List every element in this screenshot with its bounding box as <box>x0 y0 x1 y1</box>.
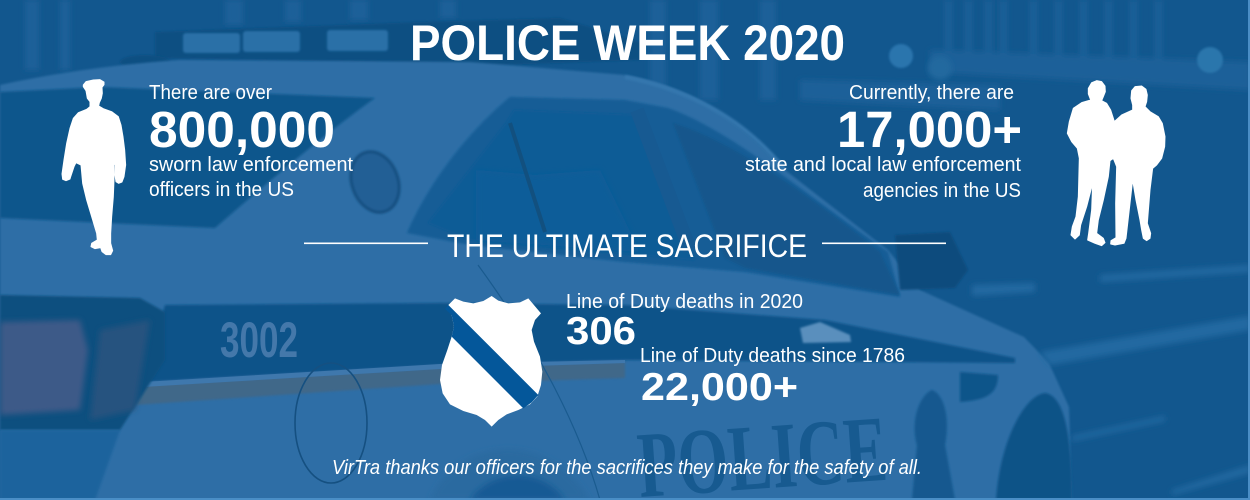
stat: law enforcement agencies: Currently, there are <box>849 82 1014 104</box>
tail light <box>0 295 165 430</box>
title: POLICE WEEK 2020 <box>410 15 845 71</box>
stat: sworn officers: officers in the US <box>149 179 294 201</box>
roof highlight <box>625 77 785 170</box>
footer thanks message: VirTra thanks our officers for the sacrifices they make for the safety of all. <box>332 457 922 479</box>
road streaks <box>972 265 1250 495</box>
door seam and wheel arch <box>469 264 600 498</box>
side window surround <box>407 97 900 297</box>
stat: sworn officers: There are over <box>149 82 272 104</box>
light bar <box>155 18 640 65</box>
number on car: 3002 <box>220 312 298 368</box>
image edge highlight <box>0 498 1250 500</box>
section heading: the ultimate sacrifice: THE ULTIMATE SACRIFICE <box>447 228 807 264</box>
stat: deaths in 2020 <box>566 291 803 353</box>
stat: law enforcement agencies: state and local law enforcement <box>745 154 1021 176</box>
car stripe <box>143 303 1015 382</box>
stat: law enforcement agencies <box>745 82 1022 202</box>
side windows <box>428 110 695 260</box>
icon: police officer silhouette <box>62 80 126 255</box>
icon: two people silhouette <box>1067 81 1165 246</box>
icon: shield with diagonal band <box>440 296 542 427</box>
car body <box>0 60 1072 500</box>
fuel door <box>295 363 367 483</box>
door handle <box>800 322 851 343</box>
stat: deaths since 1786: Line of Duty deaths since 1786 <box>640 345 905 367</box>
stat: deaths in 2020: Line of Duty deaths in 2020 <box>566 291 803 313</box>
front wheel <box>996 393 1072 500</box>
stat: sworn officers: 800,000 <box>149 101 335 158</box>
stat: law enforcement agencies: agencies in the US <box>863 180 1021 202</box>
stat: deaths in 2020: 306 <box>566 310 636 353</box>
stat: sworn officers: sworn law enforcement <box>149 154 353 176</box>
stat: sworn officers <box>149 82 353 201</box>
stat: deaths since 1786 <box>640 345 905 409</box>
dark badge on door <box>912 390 955 500</box>
rear window <box>0 87 375 228</box>
stat: deaths since 1786: 22,000+ <box>641 366 798 409</box>
seal on the car <box>348 150 402 214</box>
stat: law enforcement agencies: 17,000+ <box>837 101 1022 158</box>
mirror <box>895 232 968 290</box>
